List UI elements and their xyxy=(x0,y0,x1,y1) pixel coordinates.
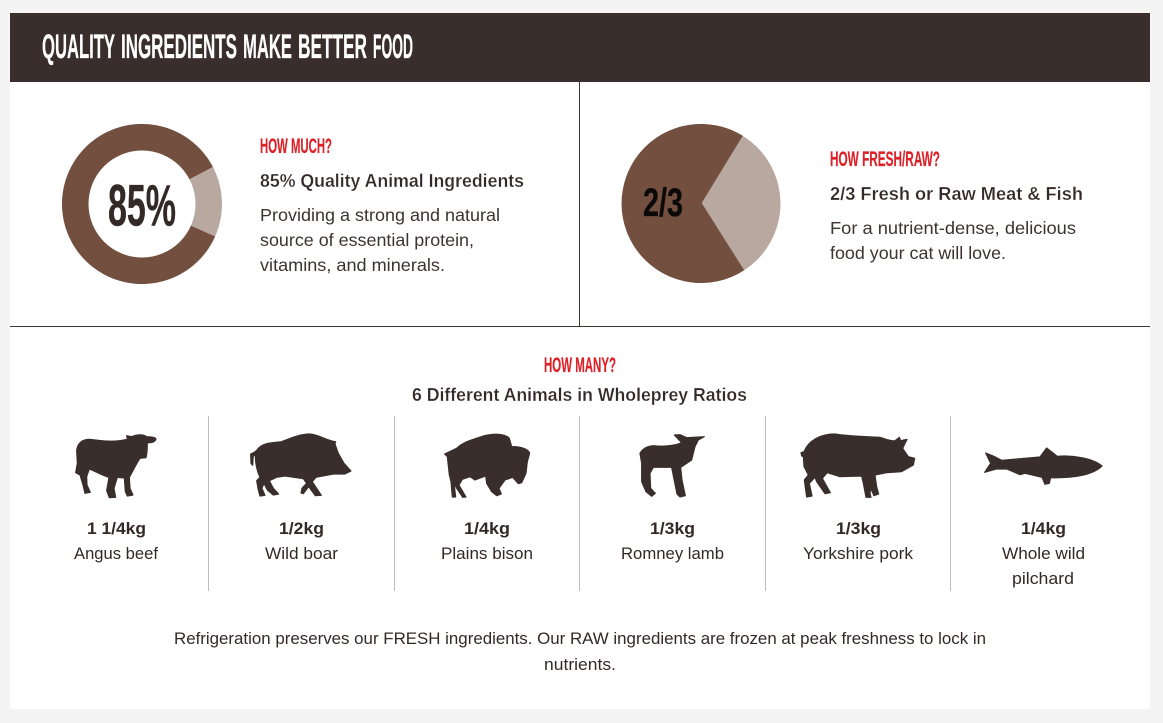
label: angus beef: Angus beef xyxy=(74,545,158,563)
heading: how fresh: HOW FRESH/RAW? xyxy=(830,148,940,171)
label: plains bison: 1/4kg xyxy=(464,520,510,538)
icon: pig xyxy=(801,434,915,497)
subheading: 6 animals: 6 Different Animals in Wholeprey Ratios xyxy=(412,384,747,405)
panel: how much xyxy=(62,124,524,284)
description: how fresh xyxy=(830,218,1076,263)
title: BETTER xyxy=(298,28,367,66)
panel: how fresh xyxy=(622,124,1083,283)
footer note: Refrigeration preserves our FRESH ingredients. Our RAW ingredients are frozen at peak freshness to lock in xyxy=(174,630,986,648)
heading: how much: HOW MUCH? xyxy=(260,135,332,158)
icon: boar xyxy=(251,434,351,496)
label: angus beef xyxy=(74,520,158,563)
label: plains bison xyxy=(441,520,533,563)
title: QUALITY xyxy=(42,28,115,66)
title: MAKE xyxy=(243,28,292,66)
label: romney lamb: Romney lamb xyxy=(621,545,724,563)
label: whole wild pilchard: 1/4kg xyxy=(1021,520,1066,538)
title: INGREDIENTS xyxy=(121,28,237,66)
icon: lamb xyxy=(640,435,704,497)
footer note xyxy=(174,630,986,674)
label: yorkshire pork: Yorkshire pork xyxy=(803,545,914,563)
label: whole wild pilchard xyxy=(1002,520,1085,588)
icon: bison xyxy=(445,434,530,497)
label: wild boar: 1/2kg xyxy=(279,520,324,538)
label: whole wild pilchard: Whole wild xyxy=(1002,545,1085,563)
header band xyxy=(10,13,1150,82)
label: wild boar: Wild boar xyxy=(265,545,339,563)
pie chart: 2/3: 2/3 xyxy=(643,181,683,225)
description: how much: source of essential protein, xyxy=(260,230,474,250)
description: how much: vitamins, and minerals. xyxy=(260,255,445,275)
description: how fresh: food your cat will love. xyxy=(830,243,1006,263)
heading: how many: HOW MANY? xyxy=(544,354,616,377)
label: plains bison: Plains bison xyxy=(441,545,533,563)
panel: how many xyxy=(74,354,1102,591)
label: whole wild pilchard: pilchard xyxy=(1012,570,1074,588)
subheading: 85%: 85% Quality Animal Ingredients xyxy=(260,170,524,191)
icon: cow xyxy=(76,435,156,498)
icon: fish xyxy=(985,448,1102,484)
donut chart: 85% xyxy=(62,124,222,284)
label: romney lamb: 1/3kg xyxy=(650,520,695,538)
pie chart: 2/3 xyxy=(622,124,780,283)
subheading: 2/3: 2/3 Fresh or Raw Meat & Fish xyxy=(830,183,1083,204)
label: yorkshire pork xyxy=(803,520,914,563)
title xyxy=(42,28,413,66)
label: yorkshire pork: 1/3kg xyxy=(836,520,881,538)
donut chart: 85%: 85% xyxy=(108,174,176,238)
label: romney lamb xyxy=(621,520,724,563)
description: how fresh: For a nutrient-dense, delicious xyxy=(830,218,1076,238)
footer note: nutrients. xyxy=(544,656,616,674)
description: how much xyxy=(260,205,500,275)
description: how much: Providing a strong and natural xyxy=(260,205,500,225)
label: wild boar xyxy=(265,520,339,563)
header band: FOOD xyxy=(373,28,413,66)
label: angus beef: 1 1/4kg xyxy=(87,520,146,538)
